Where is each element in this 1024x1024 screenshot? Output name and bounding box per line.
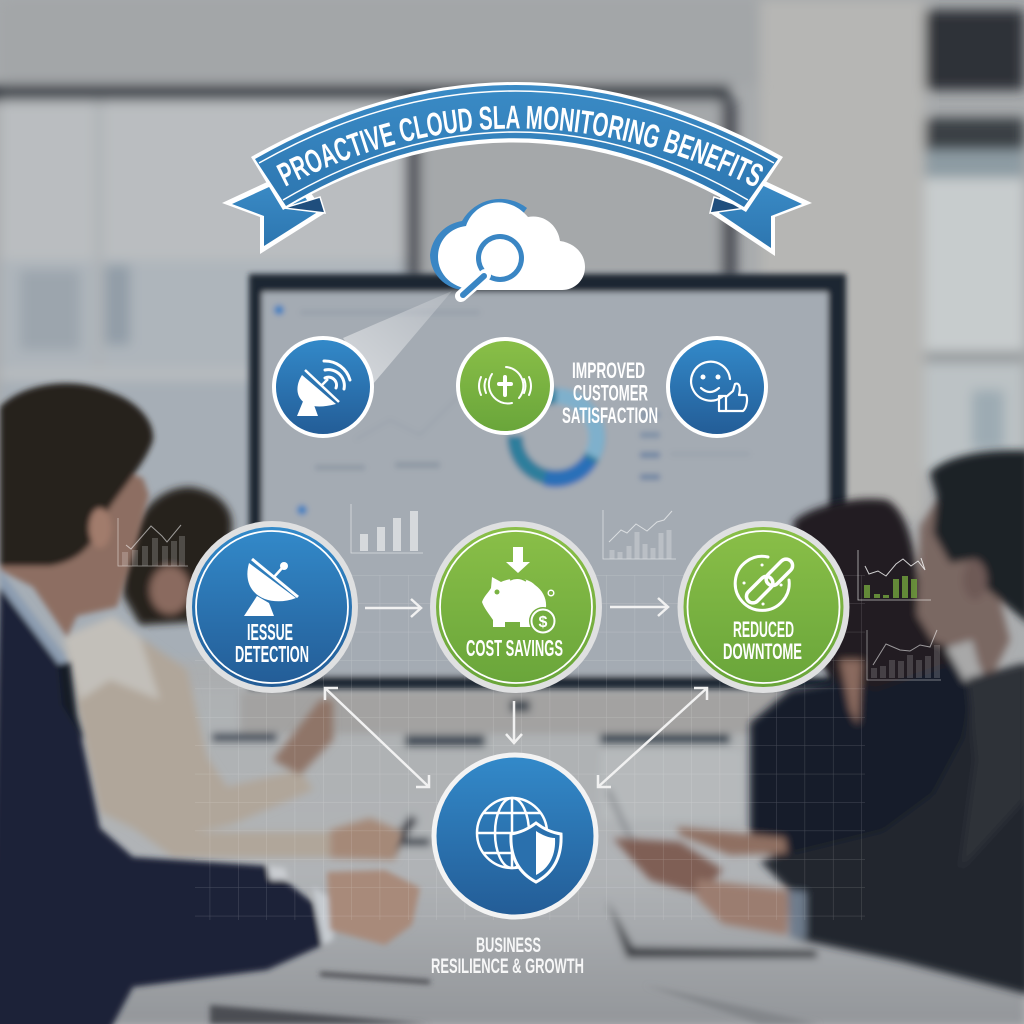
- heading: PROACTIVE CLOUD SLA MONITORING BENEFITS: [276, 106, 763, 186]
- arrow: downtime and resilience: [598, 688, 707, 787]
- label: IESSUE: [247, 619, 293, 645]
- text: improved customer satisfaction: CUSTOMER: [573, 380, 648, 406]
- label: DETECTION: [235, 641, 309, 667]
- icon: down arrow: [506, 547, 530, 573]
- node: issue detection: [186, 521, 358, 693]
- chart: mini line and bar chart lower right: [867, 630, 941, 680]
- label: COST SAVINGS: [466, 635, 563, 661]
- icon: globe with shield: [477, 798, 561, 882]
- chart: mini line and bar chart left: [118, 518, 188, 566]
- ribbon tail left: [222, 175, 325, 254]
- small circle: satellite: [274, 338, 372, 436]
- icon: smile and thumbs up: [691, 362, 747, 411]
- label: [723, 617, 802, 664]
- woman left: [123, 487, 232, 625]
- arrow: savings to resilience: [506, 701, 522, 743]
- label: [235, 619, 309, 667]
- chart: mini green bar chart right: [858, 550, 931, 600]
- icon: piggy bank with coin: [482, 577, 557, 635]
- label: REDUCED: [733, 617, 794, 642]
- arrow: savings to downtime: [610, 598, 668, 616]
- chart: mini bar chart top: [351, 504, 423, 553]
- beam from cloud to satellite: [343, 291, 452, 384]
- icon: piggy bank with coin: $: [539, 614, 548, 631]
- arrow: detection to savings: [365, 599, 421, 617]
- text: improved customer satisfaction: SATISFACTION: [562, 403, 658, 428]
- right man: [917, 480, 1010, 680]
- text: business resilience and growth: BUSINESS: [476, 934, 541, 957]
- arrow: detection and resilience: [325, 688, 429, 787]
- ribbon body: [251, 82, 783, 212]
- node: reduced downtime: [678, 521, 850, 693]
- icon: satellite dish: [244, 559, 298, 616]
- left man: [0, 440, 149, 637]
- small circle: customer satisfaction: [668, 338, 766, 436]
- icon: signal pulse: [479, 367, 531, 403]
- text: business resilience and growth: [431, 934, 584, 978]
- woman right: [793, 499, 963, 720]
- icon: cloud with magnifier: [430, 199, 585, 296]
- icon: satellite dish: [297, 361, 350, 416]
- icon: broken chain: [735, 556, 795, 610]
- text: improved customer satisfaction: IMPROVED: [572, 358, 645, 383]
- text: improved customer satisfaction: [562, 358, 658, 428]
- small circle: monitoring signal: [458, 339, 552, 433]
- text: business resilience and growth: RESILIENCE & GROWTH: [431, 955, 584, 978]
- label: DOWNTOME: [723, 639, 802, 664]
- node: cost savings: [430, 521, 602, 693]
- banner: title ribbon: [222, 82, 812, 256]
- chart: mini line and bar chart centre: [603, 510, 676, 559]
- node: business resilience: [434, 755, 596, 917]
- decorative grid overlay: [195, 575, 865, 920]
- ribbon tail right: [710, 175, 812, 256]
